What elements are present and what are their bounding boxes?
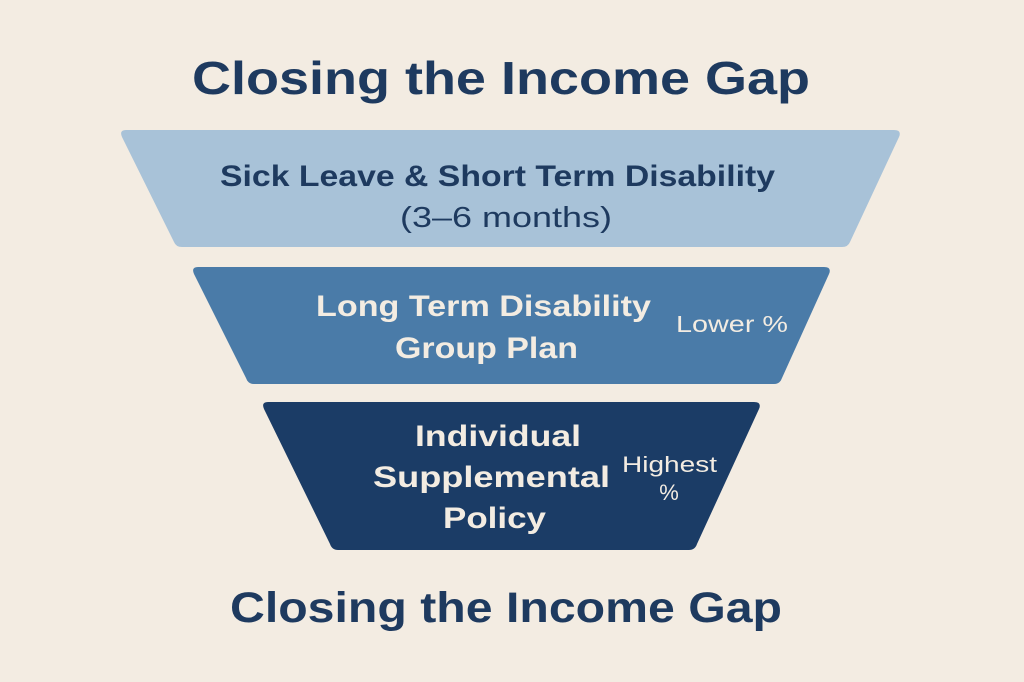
text: sick leave: Sick Leave & Short Term Disability xyxy=(220,160,775,193)
text: highest %: % xyxy=(659,480,679,505)
text: individual supplemental policy: Individual xyxy=(415,420,581,453)
footer title: Closing the Income Gap xyxy=(230,584,782,632)
title: Closing the Income Gap xyxy=(192,52,810,104)
text: lower %: Lower % xyxy=(676,311,788,337)
text: individual supplemental policy xyxy=(373,420,610,535)
panel: individual supplemental tier xyxy=(263,402,760,550)
text: duration: (3–6 months) xyxy=(400,202,612,234)
text: highest % xyxy=(622,452,717,505)
text: long term disability: Long Term Disability xyxy=(316,290,651,323)
text: group plan: Group Plan xyxy=(395,332,578,365)
text: individual supplemental policy: Policy xyxy=(443,502,546,535)
text: individual supplemental policy: Supplemental xyxy=(373,461,610,494)
panel: sick leave tier xyxy=(121,130,900,247)
panel: long term disability tier xyxy=(193,267,830,384)
text: highest %: Highest xyxy=(622,452,717,477)
